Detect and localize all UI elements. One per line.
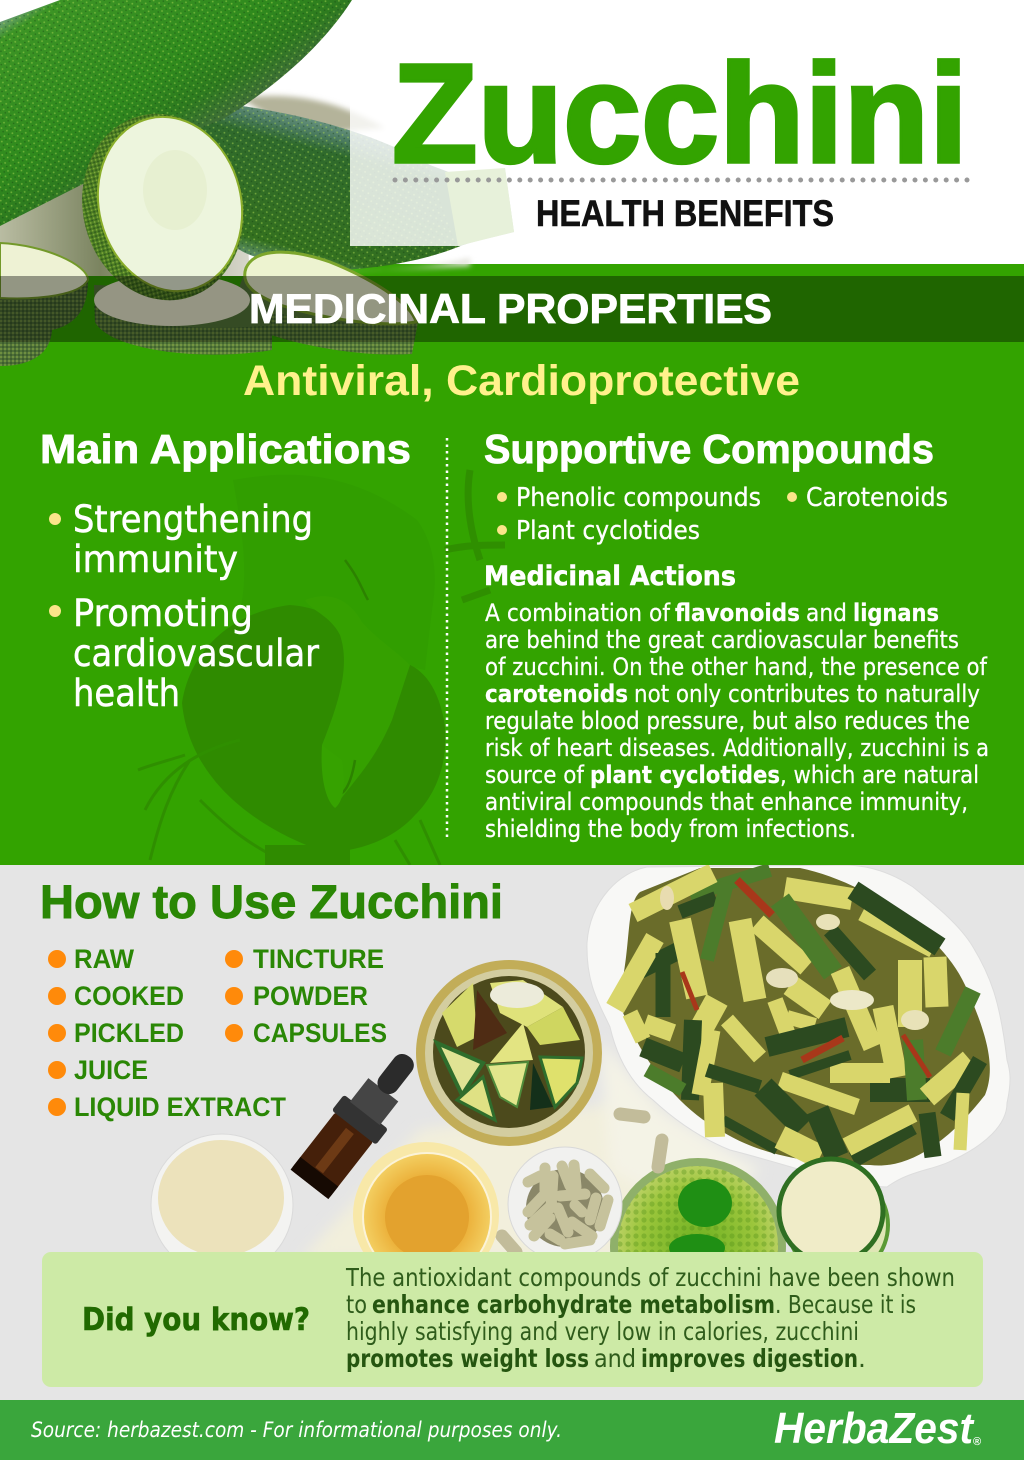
list: forms of use: POWDER — [253, 981, 368, 1011]
medicinal actions paragraph: not only contributes to naturally — [634, 680, 980, 708]
illustration: preparations group — [150, 865, 1010, 1252]
upright cut slice — [63, 96, 263, 318]
title: Zucchini — [392, 34, 968, 192]
translucent white title backing — [350, 0, 1024, 246]
heading: medicinal properties: MEDICINAL PROPERTIES — [249, 285, 772, 332]
bullet: promoting cardiovascular health — [49, 592, 320, 715]
compounds list: Plant cyclotides — [516, 516, 700, 546]
list: forms of use — [48, 944, 387, 1122]
list: forms of use: COOKED — [74, 981, 184, 1011]
warm table glow — [314, 1109, 633, 1252]
middle lower slice — [94, 274, 272, 355]
callout text: . — [858, 1344, 866, 1373]
honey bowl — [353, 1142, 499, 1252]
panel: medicinal properties green background — [0, 264, 1024, 865]
capsules bowl — [508, 1147, 622, 1261]
powder bowl — [150, 1134, 294, 1252]
logo: HerbaZest: HerbaZest — [774, 1404, 975, 1453]
bullet: strengthening immunity: immunity — [73, 538, 238, 581]
callout text: to — [346, 1290, 367, 1319]
left lower slice — [0, 243, 88, 366]
panel: supportive compounds — [484, 426, 989, 843]
callout text: . Because it is — [775, 1290, 916, 1319]
source line: Source: herbazest.com - For informational purposes only. — [31, 1418, 562, 1442]
subtitle: HEALTH BENEFITS — [536, 193, 834, 234]
heading: medicinal actions: Medicinal Actions — [484, 561, 736, 592]
panel: how to use background — [0, 865, 1024, 1400]
medicinal actions paragraph: antiviral compounds that enhance immunity, — [485, 788, 968, 816]
medicinal actions paragraph — [485, 599, 989, 843]
callout heading: Did you know? — [82, 1302, 310, 1338]
callout: did you know — [42, 1252, 983, 1387]
shadow under zucchini — [0, 130, 250, 276]
medicinal actions paragraph: , which are natural — [780, 761, 979, 789]
illustration: heart watermark — [138, 470, 505, 865]
list: forms of use: RAW — [74, 944, 134, 974]
heading: supportive compounds: Supportive Compounds — [484, 426, 934, 472]
front zucchini — [0, 0, 352, 226]
medicinal actions paragraph: A combination of — [485, 599, 670, 627]
callout text: promotes weight loss — [346, 1344, 589, 1373]
callout text: improves digestion — [641, 1344, 858, 1373]
medicinal actions paragraph: and — [806, 599, 847, 627]
compounds list — [497, 483, 948, 546]
loose capsules — [502, 1114, 662, 1252]
compounds list: Phenolic compounds — [516, 483, 761, 513]
medicinal actions paragraph: lignans — [853, 599, 939, 627]
callout text: and — [594, 1344, 636, 1373]
zucchini slices — [776, 1156, 890, 1252]
footer bar — [0, 1400, 1024, 1460]
dark band behind medicinal properties — [0, 276, 1024, 342]
plate of sauteed zucchini — [587, 865, 1010, 1187]
medicinal actions paragraph: source of — [485, 761, 584, 789]
right lower slice — [236, 252, 418, 355]
juice glass — [610, 1158, 786, 1252]
bullet: promoting cardiovascular health: health — [73, 672, 180, 715]
callout text: highly satisfying and very low in calories, zucchini — [346, 1317, 859, 1346]
logo: HerbaZest: ® — [973, 1436, 981, 1448]
list: forms of use: CAPSULES — [253, 1018, 387, 1048]
callout text: enhance carbohydrate metabolism — [372, 1290, 775, 1319]
bullet: strengthening immunity: Strengthening — [73, 498, 313, 541]
medicinal actions paragraph: carotenoids — [485, 680, 628, 708]
medicinal actions paragraph: regulate blood pressure, but also reduces the — [485, 707, 970, 735]
list: forms of use: PICKLED — [74, 1018, 184, 1048]
medicinal actions paragraph: flavonoids — [675, 599, 800, 627]
jar of pickled zucchini — [416, 960, 602, 1146]
back zucchini — [100, 104, 514, 270]
bullet: promoting cardiovascular health: Promoting — [73, 592, 253, 635]
dotted title divider — [395, 178, 968, 182]
list: forms of use: JUICE — [74, 1055, 148, 1085]
heading: how to use zucchini: How to Use Zucchini — [40, 875, 503, 928]
medicinal actions paragraph: shielding the body from infections. — [485, 815, 856, 843]
panel: main applications — [40, 426, 411, 715]
medicinal actions paragraph: plant cyclotides — [590, 761, 780, 789]
compounds list: Carotenoids — [806, 483, 948, 513]
list: forms of use: LIQUID EXTRACT — [74, 1092, 286, 1122]
bullet: strengthening immunity — [49, 498, 313, 581]
heading: main applications: Main Applications — [40, 426, 411, 472]
properties list: Antiviral, Cardioprotective — [243, 357, 800, 405]
callout text — [345, 1263, 955, 1373]
dropper bottle — [290, 1054, 414, 1200]
illustration: zucchini photo group — [0, 0, 1024, 366]
list: forms of use: TINCTURE — [253, 944, 384, 974]
medicinal actions paragraph: are behind the great cardiovascular benefits — [485, 626, 959, 654]
bullet: promoting cardiovascular health: cardiovascular — [73, 632, 320, 675]
